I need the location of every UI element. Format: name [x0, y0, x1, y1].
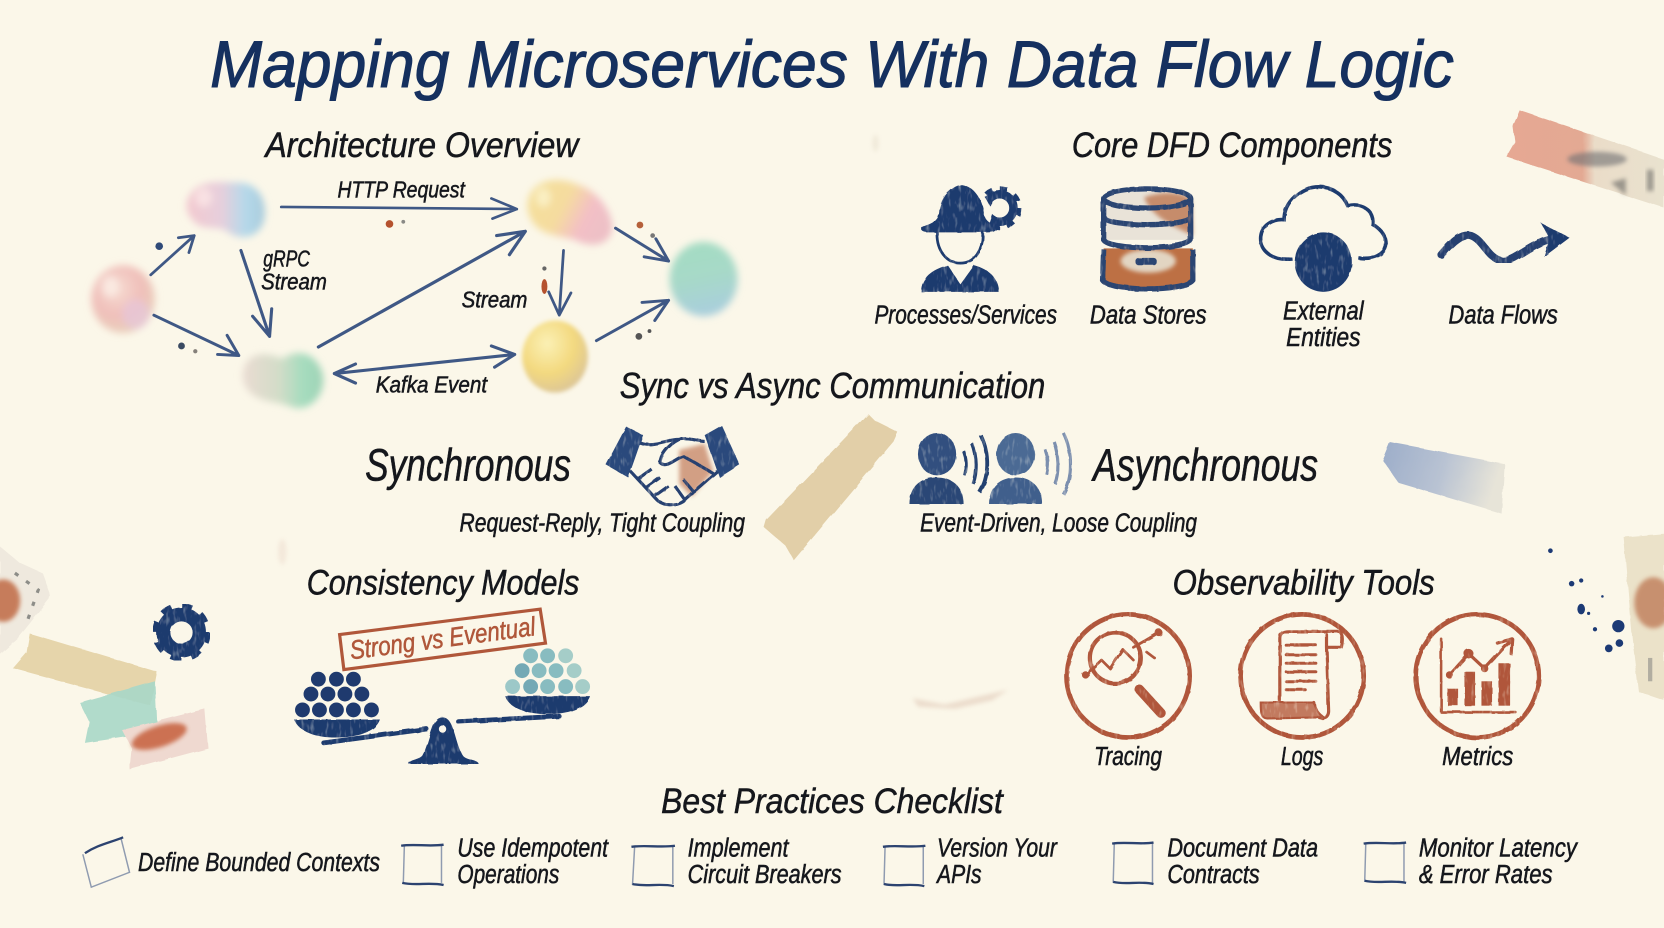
icon: tracing: [1067, 614, 1190, 738]
icon: gear: [156, 607, 207, 658]
tan tape: [13, 634, 157, 706]
arrow: left node to bottom node: [154, 315, 239, 355]
icon: data store: [1103, 189, 1194, 290]
checklist item: implement circuit breakers: Circuit Breakers: [688, 861, 842, 889]
label: gRPC stream: gRPC: [263, 245, 310, 271]
checklist item: document data contracts: Document Data: [1167, 834, 1318, 862]
label: external entities: External: [1283, 297, 1365, 325]
right stack of dots: [505, 648, 590, 694]
label: stream: Stream: [462, 287, 527, 313]
icon: data flow wave arrow: [1441, 223, 1570, 261]
service node: bottom left: [243, 353, 323, 408]
service node: top middle: [527, 180, 612, 245]
panel: core DFD components: [874, 126, 1570, 352]
heading: best practices checklist: Best Practices Checklist: [661, 782, 1004, 821]
icon: async people with signals: [909, 433, 1070, 504]
heading: observability tools: Observability Tools: [1173, 563, 1435, 602]
left stack of dots: [295, 672, 379, 717]
panel: best practices checklist: [83, 782, 1578, 889]
checklist item: version your APIs: Version Your: [937, 834, 1058, 862]
panel: consistency models: [294, 563, 590, 764]
heading: core DFD components: Core DFD Components: [1072, 126, 1392, 165]
stamp: strong vs eventual: Strong vs Eventual: [348, 611, 538, 665]
checklist item: document data contracts: [1112, 834, 1318, 889]
panel: architecture overview: [91, 126, 738, 408]
arrow: bottom middle to right: [596, 300, 669, 341]
icon: handshake: [606, 426, 740, 505]
label: processes/services: Processes/Services: [874, 302, 1057, 330]
arrow: HTTP request: [281, 198, 517, 219]
checklist item: use idempotent operations: Use Idempotent: [457, 834, 609, 862]
label: external entities: Entities: [1286, 324, 1361, 352]
checklist item: define bounded contexts: Define Bounded Contexts: [138, 849, 380, 877]
checklist item: version your APIs: APIs: [935, 861, 982, 889]
checklist item: monitor latency and error rates: & Error Rates: [1419, 861, 1553, 889]
icon: process with hat and gear: [921, 185, 1019, 292]
arrow: gRPC stream: [241, 250, 272, 336]
checklist item: version your APIs: [883, 834, 1058, 889]
icon: logs scroll: [1241, 614, 1364, 738]
pans, beam and fulcrum: [294, 696, 590, 764]
decoration: right edge tape and ink splatter: [1548, 534, 1664, 700]
checklist item: use idempotent operations: Operations: [457, 861, 559, 889]
checklist item: implement circuit breakers: [631, 834, 842, 889]
label: gRPC stream: Stream: [261, 269, 327, 295]
heading: architecture overview: Architecture Overview: [264, 126, 581, 165]
panel: sync vs async communication: [365, 365, 1505, 560]
checklist item: monitor latency and error rates: Monitor Latency: [1419, 834, 1578, 862]
checklist item: document data contracts: Contracts: [1167, 861, 1260, 889]
label: asynchronous: Asynchronous: [1091, 440, 1318, 491]
label: logs: Logs: [1281, 743, 1324, 771]
decoration: tan tape divider: [764, 414, 898, 560]
label: gRPC stream: [261, 245, 327, 295]
title: Mapping Microservices With Data Flow Logic: [210, 27, 1454, 101]
label: HTTP request: HTTP Request: [337, 176, 466, 202]
decoration: left edge collage: [0, 547, 208, 769]
ink splatter: [155, 220, 655, 353]
label: Kafka event: Kafka Event: [376, 372, 488, 398]
checklist item: monitor latency and error rates: [1364, 834, 1578, 889]
icon: metrics chart: [1416, 614, 1539, 738]
panel: observability tools: [1067, 563, 1539, 771]
label: tracing: Tracing: [1094, 743, 1162, 771]
icon: balance scale: [294, 648, 590, 764]
arrow: Kafka event: [334, 346, 515, 383]
checklist item: use idempotent operations: [401, 834, 609, 889]
torn paper scrap: [0, 547, 51, 654]
arrow: bottom node to top middle: [318, 231, 525, 347]
checklist item: implement circuit breakers: Implement: [688, 834, 789, 862]
heading: consistency models: Consistency Models: [307, 563, 579, 602]
label: metrics: Metrics: [1442, 743, 1514, 771]
arrow: stream: [549, 250, 571, 315]
label: external entities: [1283, 297, 1365, 352]
label: data flows: Data Flows: [1449, 302, 1558, 330]
service node: right: [670, 242, 738, 316]
arrow: top middle to right: [616, 228, 669, 261]
service node: bottom middle: [522, 320, 588, 393]
label: synchronous: Synchronous: [365, 440, 571, 491]
service node: top left: [187, 182, 265, 237]
ink dots: [1548, 548, 1624, 652]
label: event-driven: Event-Driven, Loose Coupling: [920, 510, 1197, 538]
label: request-reply: Request-Reply, Tight Coupling: [460, 510, 745, 538]
teal tape: [80, 681, 157, 743]
arrow: left node to top node: [151, 236, 194, 275]
decoration: salmon tape top right: [1507, 110, 1664, 208]
smear marks: [278, 135, 1008, 709]
icon: external entity cloud: [1261, 187, 1386, 292]
label: data stores: Data Stores: [1090, 302, 1207, 330]
decoration: blue tape: [1383, 443, 1505, 514]
pink tape with rust smear: [122, 709, 208, 769]
heading: sync vs async: Sync vs Async Communication: [620, 365, 1045, 406]
checklist item: define bounded contexts: [83, 837, 380, 887]
service node: left: [91, 265, 155, 333]
right tape: [1624, 534, 1664, 700]
